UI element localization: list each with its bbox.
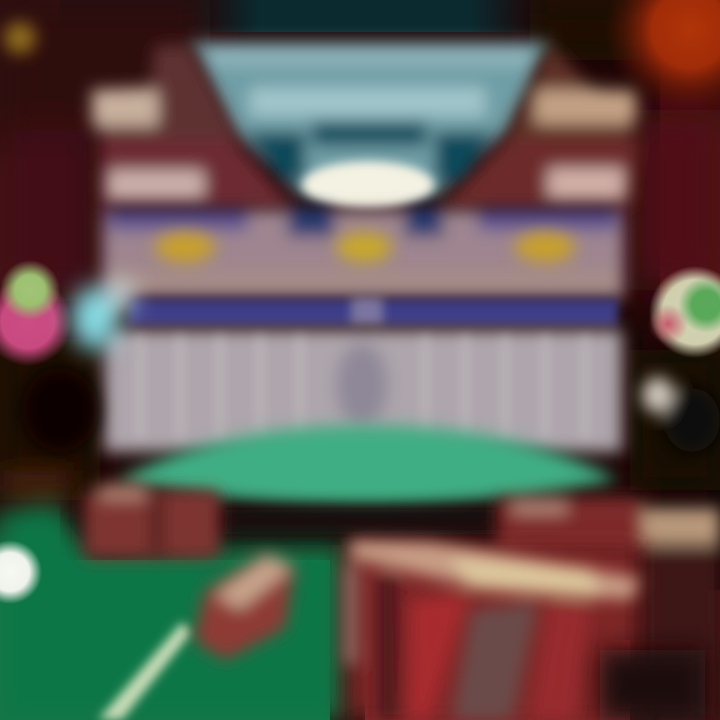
ceiling: teal inverted trapezoid xyxy=(190,42,550,195)
chips: large front stacks xyxy=(345,540,705,720)
lights: small wall glows xyxy=(4,22,720,452)
table: green felt oval xyxy=(118,425,618,505)
wall: pale striped lower panel xyxy=(104,330,622,452)
lamp: white oval light xyxy=(302,161,434,209)
wall band: purple and tan panel row xyxy=(102,208,624,298)
sign right: rainbow neon xyxy=(648,265,720,359)
stripe: blue horizontal band xyxy=(128,297,618,325)
table base: dark shadow xyxy=(225,510,495,534)
signs: three gold plaques xyxy=(155,232,575,262)
sign left: rainbow neon xyxy=(0,260,134,367)
chips: back left stack xyxy=(84,484,220,558)
floor: green felt foreground xyxy=(0,470,345,720)
chips: back right stack xyxy=(497,497,720,720)
upper wall: stepped cream and maroon tiers xyxy=(90,45,640,208)
floor line: white felt marking xyxy=(98,622,192,720)
glow: white light bottom left xyxy=(0,540,42,604)
chips: front small stack xyxy=(194,552,296,660)
